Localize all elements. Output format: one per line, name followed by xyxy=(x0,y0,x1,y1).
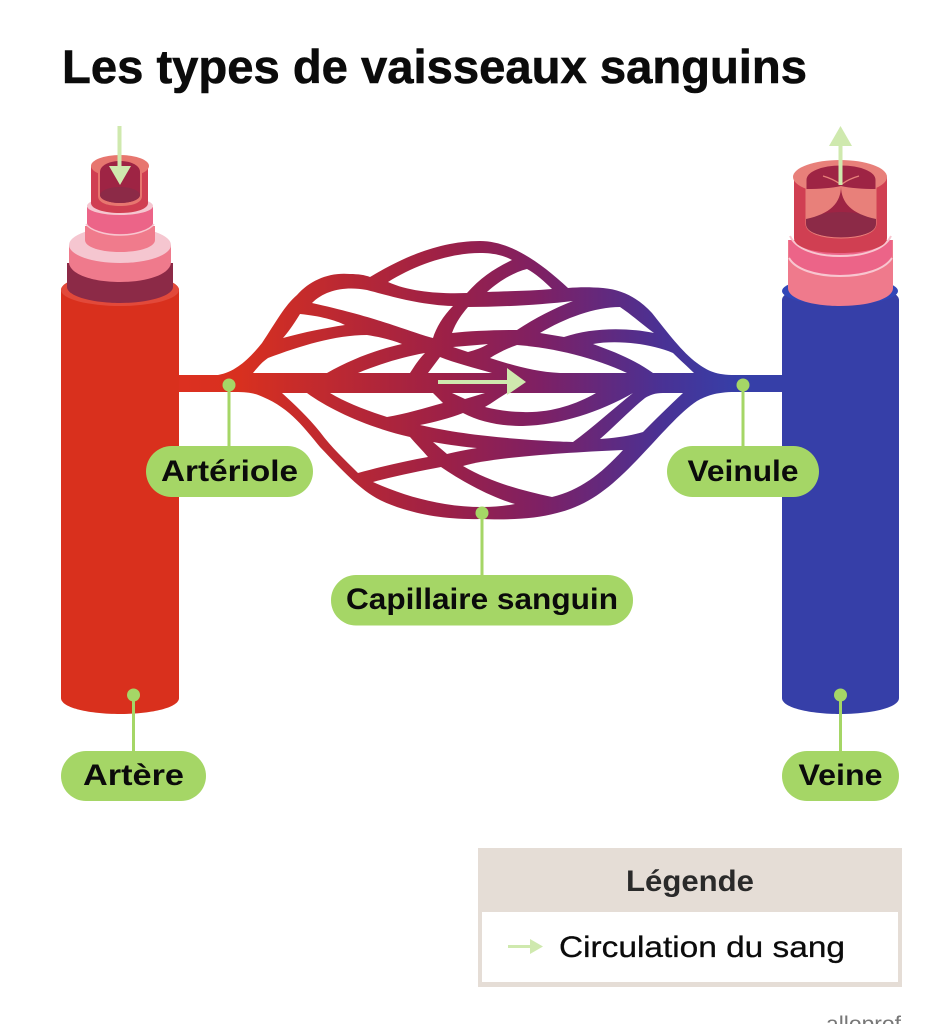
capillary network xyxy=(175,241,786,519)
legend text: Circulation du sang xyxy=(559,931,845,964)
vein outer layer xyxy=(788,240,893,306)
vein valves xyxy=(806,186,876,219)
vessel mass xyxy=(175,241,786,519)
label: capillaire sanguin xyxy=(331,506,633,626)
legend xyxy=(478,848,902,987)
arrow: blood flow xyxy=(438,368,526,395)
arrow: blood out xyxy=(829,126,852,185)
label: artère: Artère xyxy=(83,759,184,792)
artery xyxy=(61,155,179,714)
vein inner tube xyxy=(794,177,887,253)
vein xyxy=(782,160,899,714)
label: veine xyxy=(782,688,899,801)
legend arrow xyxy=(508,939,543,954)
label: capillaire sanguin: Capillaire sanguin xyxy=(346,583,618,616)
artery middle layer xyxy=(85,226,155,252)
artery inner tube xyxy=(91,166,148,213)
title: Les types de vaisseaux sanguins xyxy=(62,40,807,93)
label: artériole xyxy=(146,378,313,497)
label: artériole: Artériole xyxy=(161,455,298,488)
gaps between capillaries xyxy=(253,253,694,507)
artery body xyxy=(61,274,179,714)
arrow: blood in xyxy=(109,126,131,185)
label: veinule: Veinule xyxy=(688,455,798,488)
vein floor xyxy=(806,212,876,237)
artery outer layer xyxy=(67,263,173,303)
label: veine: Veine xyxy=(798,759,882,792)
vein body xyxy=(782,284,899,714)
label: artère xyxy=(61,688,206,801)
label: veinule xyxy=(667,378,819,497)
legend heading: Légende xyxy=(626,865,754,898)
